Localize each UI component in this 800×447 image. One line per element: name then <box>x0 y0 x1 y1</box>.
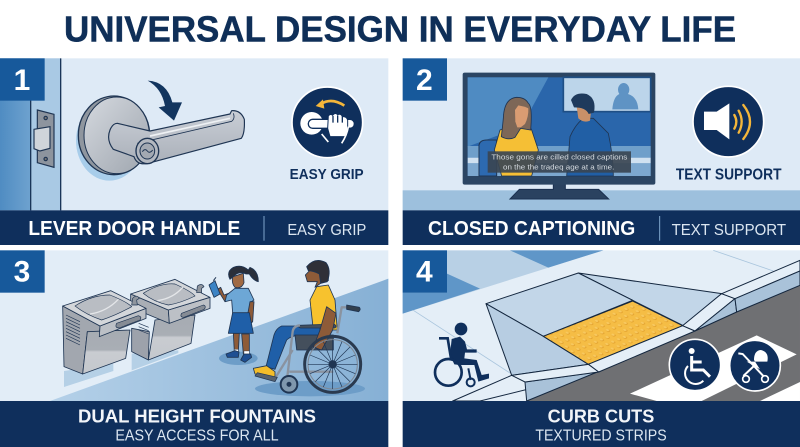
icon: television <box>463 73 655 199</box>
badge number 3 <box>0 250 45 293</box>
caption bar <box>0 210 388 245</box>
badge number 1 <box>0 58 45 101</box>
badge number 1: 1 <box>14 64 30 97</box>
caption bar: EASY GRIP <box>287 222 366 239</box>
man <box>567 93 613 176</box>
badge number 2: 2 <box>416 64 433 97</box>
panel 2: closed captioning <box>403 58 800 245</box>
woman <box>494 97 538 176</box>
icon: wheelchair user <box>435 323 489 386</box>
caption bar: TEXTURED STRIPS <box>535 427 667 444</box>
panel 1: lever door handle <box>0 58 388 245</box>
caption bar: DUAL HEIGHT FOUNTAINS <box>78 405 316 426</box>
figure: man in wheelchair <box>253 260 365 396</box>
panel 3: dual height fountains <box>0 250 388 447</box>
icon: lever handle <box>76 96 244 181</box>
icon: stroller badge <box>730 340 780 391</box>
captions <box>488 151 631 173</box>
title: UNIVERSAL DESIGN IN EVERYDAY LIFE <box>64 8 736 50</box>
badge number 4 <box>403 250 447 293</box>
tactile strip <box>543 301 683 364</box>
icon caption: EASY GRIP <box>290 167 364 183</box>
caption bar <box>403 210 800 245</box>
upper fountain <box>131 279 210 360</box>
caption bar: TEXT SUPPORT <box>672 222 786 239</box>
lower fountain <box>63 291 146 374</box>
caption bar: CURB CUTS <box>548 405 654 426</box>
icon caption: TEXT SUPPORT <box>676 166 782 183</box>
door edge <box>0 58 61 210</box>
icon: curb cut ramp <box>453 260 800 401</box>
icon: speaker badge <box>693 86 764 157</box>
badge number 4: 4 <box>416 256 433 289</box>
icon: easy grip badge <box>292 87 363 158</box>
badge number 3: 3 <box>14 256 30 289</box>
panel 4: curb cuts <box>403 250 800 447</box>
icon: crosswalk <box>630 335 800 401</box>
captions: on the the tradeq age at a time. <box>503 163 614 172</box>
icon: accessible badge <box>669 339 721 391</box>
caption bar: EASY ACCESS FOR ALL <box>115 427 279 444</box>
figure: girl <box>209 266 258 365</box>
caption bar: CLOSED CAPTIONING <box>428 218 635 240</box>
badge number 2 <box>403 58 447 101</box>
caption bar <box>0 401 388 447</box>
icon: fountains <box>63 279 210 374</box>
icon: down arrow <box>148 81 182 121</box>
caption bar <box>403 401 800 447</box>
road <box>527 285 800 401</box>
icon: latch plate <box>34 110 54 167</box>
caption bar: LEVER DOOR HANDLE <box>28 218 240 240</box>
captions: Those gons are cilled closed captions <box>491 153 628 162</box>
